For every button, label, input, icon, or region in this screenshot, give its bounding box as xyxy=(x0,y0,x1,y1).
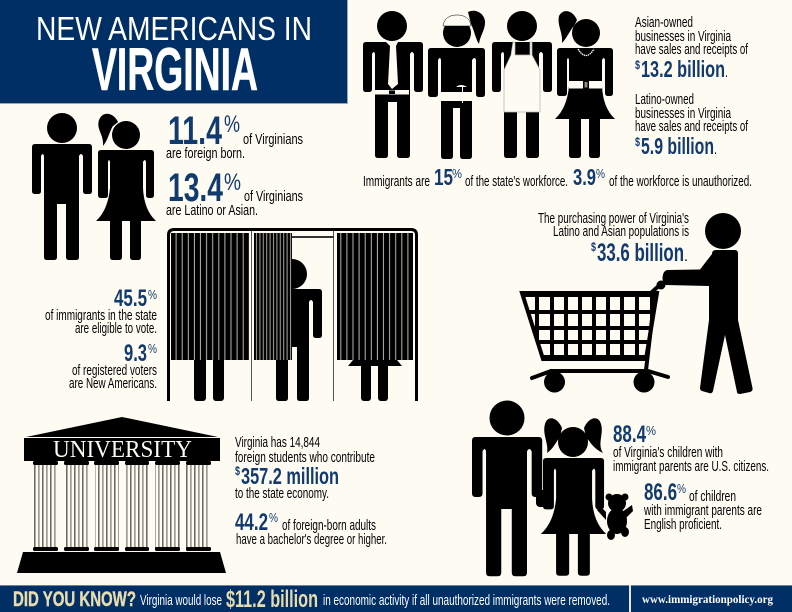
text: purchasing power: 33.6 billion xyxy=(597,239,684,267)
text: foreign students: foreign students who contribute xyxy=(235,449,375,466)
text: Asian-owned businesses: $ xyxy=(635,58,640,72)
parent xyxy=(472,400,542,576)
icon: voting booths xyxy=(168,230,416,401)
stat: eligible to vote xyxy=(45,285,157,337)
text: Latino-owned businesses xyxy=(635,91,749,159)
title banner: NEW AMERICANS IN xyxy=(36,10,312,47)
text: workforce stats: Immigrants are xyxy=(363,173,430,190)
stat: foreign born: % xyxy=(224,111,240,138)
teddy bear xyxy=(597,494,633,540)
child xyxy=(536,418,606,576)
cart xyxy=(520,280,668,392)
icon: university building xyxy=(17,417,226,573)
text: Latino-owned businesses: Latino-owned xyxy=(635,91,694,108)
text: purchasing power xyxy=(538,210,689,267)
stat: Latino or Asian xyxy=(166,166,303,219)
curtain: left xyxy=(171,233,249,360)
stat: English proficient: 86.6 xyxy=(644,479,677,506)
text: workforce stats xyxy=(363,164,752,190)
website: www.immigrationpolicy.org xyxy=(642,592,773,606)
icon: parent and child with teddy bear xyxy=(472,400,633,576)
icon: four workers xyxy=(363,11,615,159)
stat: bachelor's degree: 44.2 xyxy=(235,509,268,536)
worker: businessman xyxy=(363,11,423,158)
text: Asian-owned businesses xyxy=(635,14,749,82)
curtain: middle xyxy=(254,233,292,360)
text: foreign students: $ xyxy=(235,464,240,478)
shopper xyxy=(662,213,753,394)
stat: eligible to vote: of immigrants in the state xyxy=(45,307,157,324)
text: workforce stats: of the state's workforce. xyxy=(465,173,568,190)
text: workforce stats: % xyxy=(596,166,605,181)
stat: foreign born: of Virginians xyxy=(243,131,303,148)
stat: U.S. citizens xyxy=(613,421,769,475)
stat: Latino or Asian: 13.4 xyxy=(168,166,224,210)
stat: eligible to vote: are eligible to vote. xyxy=(75,320,157,337)
voter: booth three xyxy=(348,360,402,401)
text: purchasing power: The purchasing power of Virginia's xyxy=(538,210,689,227)
stat: bachelor's degree: of foreign-born adults xyxy=(282,517,376,534)
icon: man and woman xyxy=(32,113,156,260)
stat: foreign born xyxy=(166,109,303,162)
stat: foreign born: 11.4 xyxy=(168,109,223,153)
stat: U.S. citizens: of Virginia's children with xyxy=(613,444,723,461)
text: workforce stats: 3.9 xyxy=(573,164,596,190)
stat: English proficient xyxy=(643,479,762,533)
stat: bachelor's degree: have a bachelor's degree or higher. xyxy=(236,531,387,548)
stat: registered voters: % xyxy=(148,341,157,356)
stat: registered voters xyxy=(69,340,157,392)
footer message xyxy=(140,586,610,612)
text: purchasing power: $ xyxy=(591,240,596,254)
worker: woman with necklace xyxy=(555,11,615,158)
text: Asian-owned businesses: 13.2 billion xyxy=(641,56,725,82)
stat: eligible to vote: % xyxy=(148,287,157,302)
stat: U.S. citizens: 88.4 xyxy=(613,421,646,448)
text: Asian-owned businesses: Asian-owned xyxy=(635,14,693,31)
stat: bachelor's degree: % xyxy=(269,510,278,525)
stat: English proficient: of children xyxy=(689,488,736,505)
text: Latino-owned businesses: . xyxy=(714,141,717,158)
curtain: right xyxy=(337,233,413,360)
text: purchasing power: . xyxy=(684,248,688,265)
footer message: Virginia would lose xyxy=(140,592,222,609)
stat: registered voters: 9.3 xyxy=(124,340,147,367)
stat: registered voters: are New Americans. xyxy=(69,375,157,392)
text: Latino-owned businesses: 5.9 billion xyxy=(641,133,714,159)
text: foreign students: 357.2 million xyxy=(241,463,339,489)
stat: bachelor's degree xyxy=(235,509,387,548)
text: Asian-owned businesses: . xyxy=(725,64,728,81)
columns xyxy=(33,461,211,551)
icon: shopper with cart xyxy=(520,213,753,394)
text: purchasing power: Latino and Asian populations is xyxy=(553,223,689,240)
text: foreign students: to the state economy. xyxy=(235,485,329,502)
text: Asian-owned businesses: businesses in Virginia xyxy=(635,28,731,45)
stat: Latino or Asian: are Latino or Asian. xyxy=(166,202,258,219)
footer bar xyxy=(0,585,792,612)
stat: registered voters: of registered voters xyxy=(72,362,157,379)
stat: eligible to vote: 45.5 xyxy=(114,285,147,312)
text: foreign students: Virginia has 14,844 xyxy=(235,434,320,451)
stat: English proficient: % xyxy=(677,481,686,496)
title banner xyxy=(0,0,348,104)
worker: apron xyxy=(492,11,552,158)
text: foreign students xyxy=(235,434,375,502)
stat: foreign born: are foreign born. xyxy=(166,145,245,162)
text: workforce stats: 15 xyxy=(434,164,453,190)
text: Latino-owned businesses: businesses in Virginia xyxy=(635,105,731,122)
stat: U.S. citizens: % xyxy=(646,423,656,438)
stat: English proficient: English proficient. xyxy=(644,516,722,533)
title banner: VIRGINIA xyxy=(92,36,258,103)
worker: construction xyxy=(428,11,485,159)
voter legs: booth one xyxy=(194,350,224,401)
did you know: DID YOU KNOW? xyxy=(13,588,136,611)
voter: booth two xyxy=(276,259,322,401)
stat: Latino or Asian: of Virginians xyxy=(244,188,303,205)
text: Latino-owned businesses: $ xyxy=(635,135,640,149)
icon: university building: UNIVERSITY xyxy=(53,437,192,463)
stat: Latino or Asian: % xyxy=(224,169,241,196)
footer message: in economic activity if all unauthorized immigrants were removed. xyxy=(323,592,610,609)
text: workforce stats: % xyxy=(452,166,462,181)
